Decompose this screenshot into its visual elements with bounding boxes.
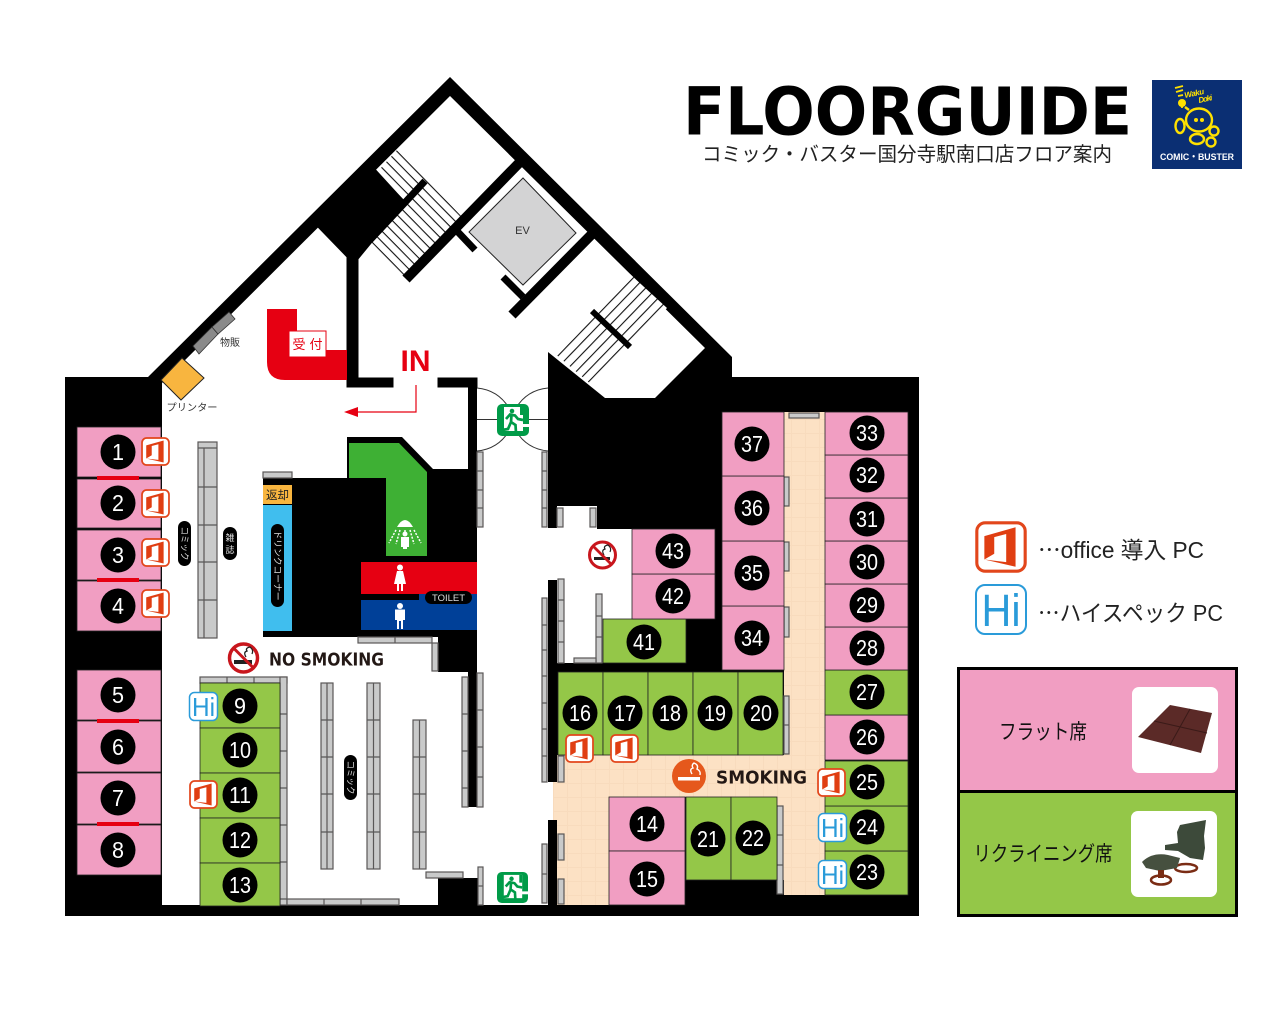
seat 33 — [825, 412, 908, 455]
legend: high spec PC: Hi — [982, 585, 1020, 636]
label: printer: プリンター — [166, 402, 218, 414]
toilet label: TOILET — [432, 593, 465, 604]
seat 3: 3 — [112, 542, 124, 568]
subtitle: コミック・バスター国分寺駅南口店フロア案内 — [702, 143, 1112, 166]
seat 12: 12 — [229, 827, 251, 853]
seat 19: 19 — [704, 700, 726, 726]
seat 12 — [200, 818, 280, 863]
seat 34 — [722, 606, 784, 670]
seat 10 — [200, 728, 280, 773]
seat 20: 20 — [750, 700, 772, 726]
seat 37: 37 — [741, 431, 763, 457]
shower room — [349, 443, 427, 556]
logo: comic buster: Waku — [1184, 87, 1205, 100]
title: FLOORGUIDE — [683, 74, 1132, 150]
drink corner — [263, 505, 292, 631]
seat 14 — [609, 797, 685, 851]
seat 3 — [77, 530, 161, 580]
label: comics: コミック — [180, 526, 190, 560]
seat 23: 23 — [856, 859, 878, 885]
no smoking label: NO SMOKING — [269, 650, 384, 670]
seat 35 — [722, 541, 784, 606]
seat 2: 2 — [112, 490, 124, 516]
recliner seat row — [958, 792, 1236, 916]
logo: comic buster — [1152, 80, 1242, 169]
seat 18 — [648, 672, 693, 755]
seat 14: 14 — [636, 811, 658, 837]
seat 4 — [77, 581, 161, 631]
icon: emergency exit upper — [497, 404, 529, 436]
lower right staircase — [553, 274, 667, 386]
elevator: EV — [515, 225, 530, 237]
smoking sign — [672, 759, 706, 793]
entrance doors — [477, 388, 548, 451]
legend: office PC — [977, 523, 1204, 571]
seat 25 — [825, 761, 908, 806]
logo: comic buster: Doki — [1198, 93, 1214, 105]
women's toilet — [361, 562, 477, 594]
men's toilet — [361, 594, 477, 630]
seat 4: 4 — [112, 593, 124, 619]
seat 16: 16 — [569, 700, 591, 726]
logo: comic buster: COMIC・BUSTER — [1160, 152, 1234, 163]
seat 28 — [825, 627, 908, 670]
flat seat row: フラット席 — [999, 721, 1087, 744]
entrance arrow — [344, 385, 416, 417]
seat 5: 5 — [112, 682, 124, 708]
seat 8 — [77, 825, 161, 875]
no smoking sign — [230, 644, 258, 672]
seat 29 — [825, 584, 908, 627]
seat 42 — [632, 574, 715, 619]
seat 27 — [825, 670, 908, 715]
seat 6 — [77, 721, 161, 772]
seat 13: 13 — [229, 872, 251, 898]
seat 15: 15 — [636, 866, 658, 892]
flat seat row — [958, 668, 1236, 792]
seat 32: 32 — [856, 462, 878, 488]
seat 32 — [825, 455, 908, 498]
seat 36 — [722, 476, 784, 541]
seat type panel — [958, 668, 1236, 916]
seat 34: 34 — [741, 625, 763, 651]
seat 27: 27 — [856, 679, 878, 705]
seat 31: 31 — [856, 506, 878, 532]
label: magazines: 誌 — [225, 544, 235, 555]
legend: office PC: ⋯office 導入 PC — [1038, 537, 1204, 563]
seat 11 — [200, 773, 280, 818]
seat 30 — [825, 541, 908, 584]
seat divider bars — [97, 476, 139, 826]
reception counter: 受付 — [292, 337, 322, 352]
office badges — [142, 438, 845, 808]
shelves — [198, 413, 819, 905]
seat 18: 18 — [659, 700, 681, 726]
hi-spec badge seat 24: Hi — [821, 813, 844, 843]
seat 9: 9 — [234, 693, 246, 719]
seat 43 — [632, 529, 715, 574]
seat 13 — [200, 863, 280, 906]
label: merchandise: 物販 — [220, 336, 240, 349]
seat 31 — [825, 498, 908, 541]
seat 9 — [200, 683, 280, 728]
seat 23 — [825, 851, 908, 895]
seat 30: 30 — [856, 549, 878, 575]
legend: high spec PC — [976, 585, 1223, 636]
return counter — [263, 485, 292, 504]
seat 21 — [686, 797, 731, 880]
interior floor — [162, 96, 705, 905]
no smoking sign right room — [590, 542, 616, 568]
seat 16 — [558, 672, 603, 755]
label: comics center: コミック — [346, 760, 356, 794]
seat 36: 36 — [741, 495, 763, 521]
seat 11: 11 — [229, 782, 251, 808]
central black block — [263, 387, 477, 637]
seat 20 — [738, 672, 783, 755]
hi-spec badge seat 23: Hi — [821, 860, 844, 890]
seat 7: 7 — [112, 785, 124, 811]
seat 26: 26 — [856, 724, 878, 750]
hi-spec badge seat 9: Hi — [192, 692, 215, 722]
seat 21: 21 — [697, 826, 719, 852]
seat 25: 25 — [856, 769, 878, 795]
floor plan — [65, 77, 919, 916]
upper staircase — [342, 149, 462, 280]
seat 22: 22 — [742, 825, 764, 851]
seat 29: 29 — [856, 592, 878, 618]
building outer walls — [65, 77, 919, 916]
seat 7 — [77, 773, 161, 824]
elevator — [469, 178, 576, 285]
seat 41: 41 — [633, 629, 655, 655]
seat 28: 28 — [856, 635, 878, 661]
recliner seat row: リクライニング席 — [974, 843, 1112, 866]
seat 5 — [77, 670, 161, 720]
smoking label: SMOKING — [716, 768, 807, 788]
seat 22 — [731, 797, 777, 880]
seat 19 — [693, 672, 738, 755]
seat 2 — [77, 479, 161, 528]
icon: emergency exit lower — [497, 872, 528, 903]
lower black walls — [438, 580, 557, 905]
return counter: 返却 — [266, 489, 289, 502]
toilet label — [425, 591, 472, 604]
seat 10: 10 — [229, 737, 251, 763]
seat 26 — [825, 715, 908, 760]
seat 17: 17 — [614, 700, 636, 726]
seat 35: 35 — [741, 560, 763, 586]
seat 42: 42 — [662, 583, 684, 609]
seat 15 — [609, 851, 685, 905]
seat 43: 43 — [662, 538, 684, 564]
legend: high spec PC: ⋯ハイスペック PC — [1038, 600, 1223, 626]
label: magazines: 雑 — [225, 532, 235, 543]
seat 33: 33 — [856, 420, 878, 446]
seat 24 — [825, 806, 908, 851]
seat 17 — [603, 672, 648, 755]
seat 37 — [722, 412, 784, 476]
label: comics — [178, 521, 191, 566]
label: magazines — [223, 527, 237, 560]
seat 41 — [603, 619, 686, 663]
seat 6: 6 — [112, 734, 124, 760]
seat 8: 8 — [112, 837, 124, 863]
seat 1 — [77, 427, 161, 477]
seat 24: 24 — [856, 814, 878, 840]
stair landing block and walls — [316, 160, 630, 387]
entrance label: IN — [400, 345, 430, 378]
printer — [161, 358, 204, 400]
sales shelf — [193, 312, 235, 354]
label: comics center — [344, 755, 357, 800]
reception counter — [267, 309, 347, 380]
smoking area floor — [553, 412, 825, 905]
seat 1: 1 — [112, 439, 124, 465]
drink corner: ドリンクコーナー — [272, 530, 282, 600]
